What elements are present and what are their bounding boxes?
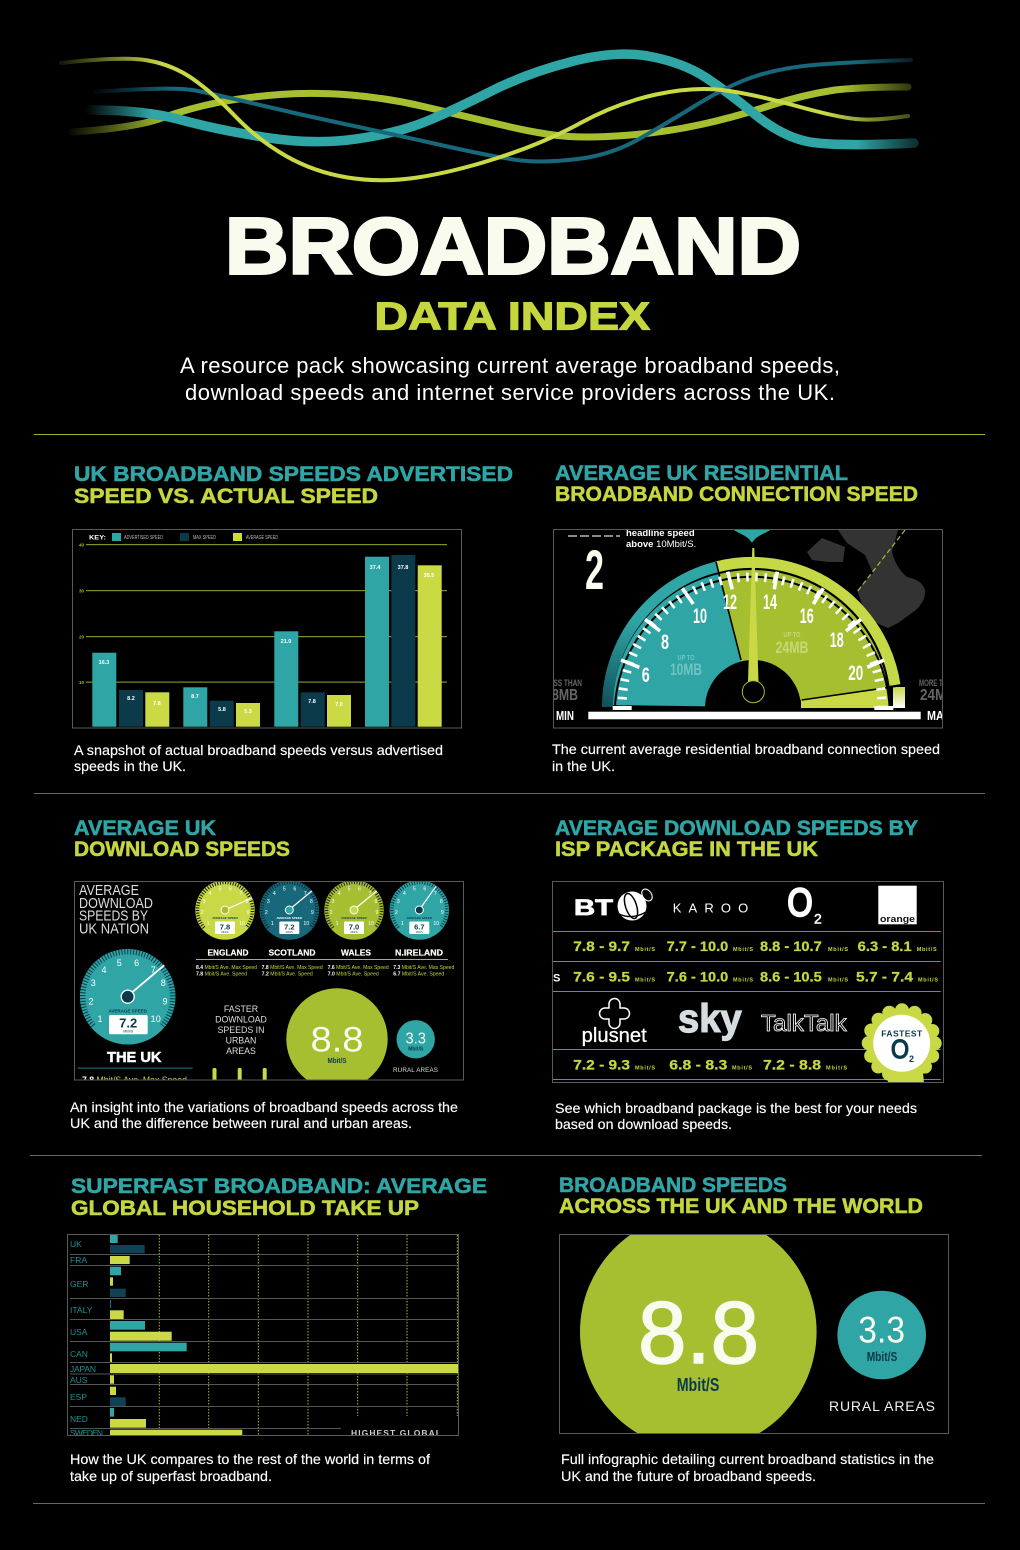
caption: take up: How the UK compares to the rest of the world in terms of <box>70 1451 430 1467</box>
headline speed note <box>568 530 696 589</box>
heading: UK and world speeds <box>559 1174 923 1218</box>
country labels: NED <box>70 1414 88 1424</box>
gauge: Scotland: 9 <box>311 910 314 916</box>
speed row 1: Mbit/S <box>917 947 937 953</box>
rural circle: 3.3 <box>858 1309 905 1350</box>
country labels: USA <box>70 1327 88 1337</box>
heading: advertised vs actual: SPEED VS. ACTUAL SPEED <box>74 485 378 508</box>
rural circle <box>837 1291 926 1379</box>
gauge: England: 9 <box>247 910 250 916</box>
heading: UK and world speeds: BROADBAND SPEEDS <box>559 1174 787 1197</box>
gauge: the UK: AVERAGE SPEED <box>108 1009 148 1014</box>
speed row 2: S <box>553 972 560 984</box>
headline speed note: headline speed <box>626 528 695 539</box>
bar values: 5.3 <box>244 709 252 715</box>
bars <box>92 555 442 727</box>
bar values: 7.8 <box>153 701 161 707</box>
panel: speedometer gauge <box>554 530 942 720</box>
gauge: Wales: 10 <box>368 921 374 927</box>
panel label: UK NATION <box>79 922 149 938</box>
caption: advertised vs actual: speeds in the UK. <box>74 758 186 774</box>
gauge: the UK: 6 <box>134 958 139 968</box>
bar values: 37.8 <box>398 565 408 571</box>
min and max labels: MORE THAN <box>919 678 956 688</box>
speed row 1: 6.3 - 8.1 <box>858 939 912 954</box>
bar values: 7.8 <box>308 699 316 705</box>
speed row 1: Mbit/S <box>828 947 848 953</box>
gauge: Scotland: Mbit/S <box>286 931 293 934</box>
caption: ISP speeds: based on download speeds. <box>555 1116 732 1132</box>
urban note: SPEEDS IN <box>218 1025 264 1035</box>
gauge: the UK: Mbit/S <box>123 1030 134 1034</box>
speed row 2: 5.7 - 7.4 <box>856 970 914 984</box>
panel: global take up bar chart <box>68 1234 459 1438</box>
panel label: AVERAGE <box>79 883 139 899</box>
gauge: Scotland: 7.2 <box>284 922 295 932</box>
heading: ISP package speeds <box>555 817 918 861</box>
heading: superfast take up <box>71 1175 487 1220</box>
heading: UK and world speeds: ACROSS THE UK AND THE WORLD <box>559 1195 923 1218</box>
caption: residential speed <box>552 741 940 774</box>
heading: download speeds: AVERAGE UK <box>74 817 216 840</box>
band labels: UP TO <box>784 630 801 639</box>
gauge: Wales: 9 <box>376 910 379 916</box>
gauge: Wales: 7.0 <box>349 922 359 932</box>
gauge: Northern Ireland: Mbit/S <box>416 931 423 934</box>
heading: advertised vs actual <box>74 463 513 508</box>
grid lines <box>159 1235 457 1436</box>
gauge: Wales: 8 <box>375 899 378 905</box>
dial numbers: 6 <box>642 664 650 687</box>
gauge: Northern Ireland: 8 <box>440 899 443 905</box>
bar values: 8.2 <box>127 696 135 702</box>
speed row 1: Mbit/S <box>635 947 655 953</box>
gauge: Wales: AVERAGE SPEED <box>341 916 368 920</box>
urban speed circle <box>286 988 388 1090</box>
headline speed note: above 10Mbit/S. <box>626 539 696 550</box>
speed row 3: Mbit/S <box>732 1066 752 1072</box>
speed row 2: Mbit/S <box>635 978 655 984</box>
gauge: Northern Ireland: 4 <box>403 891 406 897</box>
panel: bar chart of advertised and actual speeds <box>72 530 462 728</box>
gauge: England: 6 <box>229 886 232 892</box>
intro text <box>180 353 840 405</box>
urban circle: 8.8 <box>638 1283 759 1382</box>
heading: residential connection speed: AVERAGE UK RESIDENTIAL <box>555 462 848 485</box>
band labels <box>670 632 808 675</box>
gauge: England: 4 <box>209 891 212 897</box>
panel: urban and rural speeds <box>560 1213 948 1450</box>
gauge: Northern Ireland: AVERAGE SPEED <box>406 916 433 920</box>
country labels: SWEDEN <box>70 1428 103 1438</box>
logo: BT <box>574 887 654 920</box>
urban speed circle: 8.8 <box>310 1020 364 1060</box>
logo: TalkTalk: TalkTalk <box>761 1010 847 1036</box>
dial numbers: 16 <box>800 605 814 628</box>
fastest rosette: O <box>891 1034 909 1064</box>
speed row 1: 8.8 - 10.7 <box>760 939 822 954</box>
gauge: England: 8 <box>246 899 249 905</box>
speed row 2: 7.6 - 10.0 <box>667 970 728 984</box>
gauge: Wales: 7 <box>369 891 372 897</box>
country labels: ESP <box>70 1392 87 1402</box>
gauge: Wales: 6 <box>358 886 361 892</box>
nation names: SCOTLAND <box>268 948 316 958</box>
gauge: England: 5 <box>219 886 222 892</box>
speed row 1: 7.8 - 9.7 <box>573 939 630 954</box>
gauge: Northern Ireland: 1 <box>401 921 404 927</box>
urban speed circle: Mbit/S <box>328 1058 347 1065</box>
gauge: England: 3 <box>203 899 206 905</box>
gauge: Wales: 5 <box>348 886 351 892</box>
heading: superfast take up: GLOBAL HOUSEHOLD TAKE UP <box>71 1197 419 1220</box>
grid and axis labels: 40 <box>79 542 85 548</box>
country labels <box>70 1239 103 1438</box>
pointer tip <box>734 530 770 543</box>
bar values: 8.7 <box>191 694 199 700</box>
gauge: Northern Ireland: 5 <box>413 886 416 892</box>
gauge: Wales: 3 <box>332 899 335 905</box>
gauge: England: Mbit/S <box>221 931 229 934</box>
title: BROADBAND <box>225 202 801 290</box>
caption: advertised vs actual <box>74 742 443 774</box>
gauge: the UK <box>80 949 176 1044</box>
fastest rosette: 2 <box>909 1054 914 1064</box>
urban note: DOWNLOAD <box>215 1014 267 1024</box>
UK label and figure: THE UK <box>107 1049 162 1066</box>
gauge: Northern Ireland: 6.7 <box>414 922 425 932</box>
logo: BT: BT <box>574 895 614 920</box>
gauge: Northern Ireland: 3 <box>397 899 400 905</box>
country labels: CAN <box>70 1349 88 1359</box>
speed row 1 <box>574 941 936 952</box>
gauge: Scotland: 7 <box>304 891 307 897</box>
gauge: Northern Ireland <box>390 880 449 940</box>
speed row 2: Mbit/S <box>828 978 848 984</box>
gauge: the UK: 1 <box>97 1014 103 1024</box>
caption: take up <box>70 1451 430 1484</box>
gauge: Northern Ireland: 9 <box>441 910 444 916</box>
bar values: 37.4 <box>370 565 381 571</box>
nation speed figures: 6.7 Mbit/S Ave. Speed <box>393 972 445 978</box>
speed row 3: 7.2 - 9.3 <box>573 1058 631 1072</box>
panel: ISP speed table <box>552 882 944 1083</box>
gauge: Scotland: AVERAGE SPEED <box>276 916 303 920</box>
panel label: DOWNLOAD <box>79 896 153 912</box>
nation speed figures <box>196 965 455 978</box>
panel: download speeds by nation <box>74 880 464 1090</box>
rural label: RURAL AREAS <box>829 1398 935 1414</box>
dial numbers: 18 <box>830 629 844 652</box>
min and max labels: MIN <box>556 708 574 723</box>
caption: full infographic <box>561 1451 934 1484</box>
band labels: UP TO <box>678 653 695 662</box>
min and max labels: MAX <box>927 708 951 723</box>
nation speed figures: 7.6 Mbit/S Ave. Max Speed <box>328 965 389 971</box>
bar values <box>99 565 434 715</box>
caption: advertised vs actual: A snapshot of actual broadband speeds versus advertised <box>74 742 443 758</box>
urban circle: Mbit/S <box>677 1375 719 1395</box>
gauge: Scotland: 6 <box>293 886 296 892</box>
heading: residential connection speed: BROADBAND CONNECTION SPEED <box>555 483 918 506</box>
gauge: the UK: 4 <box>101 965 107 975</box>
nation names: WALES <box>341 948 371 958</box>
chart key <box>89 533 278 542</box>
gauge: Scotland: 5 <box>283 886 286 892</box>
caption: download speeds: An insight into the variations of broadband speeds across the <box>70 1099 458 1115</box>
gauge: England: 7 <box>240 891 243 897</box>
caption: ISP speeds: See which broadband package is the best for your needs <box>555 1100 917 1116</box>
dial numbers: 10 <box>693 605 707 628</box>
gauge: Northern Ireland: 10 <box>433 921 439 927</box>
fastest rosette <box>869 1010 935 1083</box>
rural speed circle: 3.3 <box>405 1030 426 1048</box>
urban note: AREAS <box>226 1046 256 1056</box>
gauge: the UK: 10 <box>151 1014 161 1024</box>
country labels: ITALY <box>70 1305 93 1315</box>
caption: full infographic: Full infographic detailing current broadband statistics in the <box>561 1451 934 1467</box>
country labels: FRA <box>70 1255 87 1265</box>
heading: ISP package speeds: ISP PACKAGE IN THE UK <box>555 838 818 861</box>
rural speed circle: Mbit/S <box>408 1046 424 1052</box>
speed row 2: 7.6 - 9.5 <box>573 970 631 984</box>
band labels: 10MB <box>670 660 702 679</box>
logo: Karoo: KAROO <box>673 900 748 916</box>
speed row 2: Mbit/S <box>733 978 753 984</box>
min and max labels: LESS THAN <box>545 678 582 688</box>
chart key: AVERAGE SPEED <box>246 535 278 541</box>
grid and axis labels <box>79 542 447 685</box>
grid and axis labels: 20 <box>79 634 85 640</box>
gauge: England: 2 <box>201 910 204 916</box>
gauge: Scotland: 1 <box>271 921 274 927</box>
heading: download speeds: DOWNLOAD SPEEDS <box>74 838 290 861</box>
dial numbers: 8 <box>661 631 669 654</box>
fastest rosette: FASTEST <box>881 1028 923 1038</box>
headline speed note: 2 <box>585 538 604 601</box>
gauge: Northern Ireland: 6 <box>423 886 426 892</box>
heading: advertised vs actual: UK BROADBAND SPEEDS ADVERTISED <box>74 463 513 486</box>
table rules <box>553 931 941 1080</box>
nation speed figures: 7.2 Mbit/S Ave. Speed <box>262 972 313 978</box>
speed row 1: 7.7 - 10.0 <box>667 939 728 954</box>
caption: download speeds: UK and the difference between rural and urban areas. <box>70 1115 412 1131</box>
gauge: Northern Ireland: 2 <box>395 910 398 916</box>
gauge: England: 1 <box>207 921 210 927</box>
gauge: Wales: Mbit/S <box>350 931 358 934</box>
min and max labels <box>554 680 942 720</box>
country labels: AUS <box>70 1375 88 1385</box>
bar values: 35.5 <box>424 573 434 579</box>
UK label and figure: 7.8 Mbit/S Ave. Max Speed <box>82 1075 187 1085</box>
band labels: 24MB <box>776 638 808 657</box>
intro text: A resource pack showcasing current average broadband speeds, <box>180 353 840 378</box>
speed row 3: Mbit/S <box>826 1066 847 1072</box>
nation names <box>208 949 443 956</box>
dial numbers: 12 <box>723 591 737 614</box>
logo: O2: 2 <box>814 910 822 926</box>
gauge: the UK: 3 <box>91 978 96 988</box>
nation speed figures: 8.4 Mbit/S Ave. Max Speed <box>196 965 257 971</box>
grid and axis labels: 30 <box>79 588 85 594</box>
speed row 2: 8.6 - 10.5 <box>760 970 822 984</box>
rural speed circle: RURAL AREAS <box>393 1067 438 1074</box>
dial <box>602 556 905 708</box>
speed row 3: 6.8 - 8.3 <box>669 1058 728 1072</box>
gauge: Scotland: 4 <box>273 891 276 897</box>
subtitle: DATA INDEX <box>374 296 650 338</box>
gauge: Northern Ireland: 7 <box>434 891 437 897</box>
country labels: JAPAN <box>70 1364 96 1374</box>
caption: residential speed: The current average residential broadband connection speed <box>552 741 940 757</box>
gauge: England: AVERAGE SPEED <box>212 916 239 920</box>
logo: Orange: orange <box>880 914 915 924</box>
nation names: ENGLAND <box>208 948 248 958</box>
rural speed circle <box>393 1020 438 1074</box>
logo: Plusnet: plusnet <box>582 1025 647 1047</box>
rural circle: Mbit/S <box>867 1349 898 1364</box>
dial numbers <box>642 591 863 687</box>
speed row 2 <box>553 972 938 982</box>
speed row 3: Mbit/S <box>635 1066 655 1072</box>
caption: full infographic: UK and the future of broadband speeds. <box>561 1468 816 1484</box>
chart key: MAX SPEED <box>193 535 216 541</box>
gauge: Wales: 2 <box>330 910 333 916</box>
nation speed figures: 7.3 Mbit/S Ave. Max Speed <box>393 965 455 971</box>
nation names: N.IRELAND <box>395 948 443 958</box>
country bars <box>110 1235 459 1436</box>
heading: download speeds <box>74 817 290 861</box>
dial numbers: 20 <box>848 662 863 685</box>
bar values: 21.0 <box>281 639 291 645</box>
gauge: England: 7.8 <box>220 922 230 932</box>
gauge: Wales: 4 <box>338 891 341 897</box>
gauge: the UK: 9 <box>162 997 168 1007</box>
logo: Plusnet <box>582 998 647 1047</box>
speed row 2: Mbit/S <box>918 978 938 984</box>
urban note: FASTER <box>224 1004 258 1014</box>
gauge: the UK: 2 <box>88 997 94 1007</box>
UK label and figure <box>78 1052 193 1080</box>
dial numbers: 14 <box>763 591 777 614</box>
speed row 3: 7.2 - 8.8 <box>763 1058 822 1072</box>
logo: Sky: sky <box>678 997 742 1041</box>
gauge: England: 10 <box>239 921 245 927</box>
caption: download speeds <box>70 1099 458 1131</box>
nation speed figures: 7.8 Mbit/S Ave. Speed <box>196 972 247 978</box>
icon: UK map <box>807 530 925 628</box>
needle <box>742 548 764 703</box>
caption: residential speed: in the UK. <box>552 758 615 774</box>
panel label: SPEEDS BY <box>79 908 148 924</box>
speed row 3 <box>574 1060 847 1070</box>
urban note: URBAN <box>226 1036 256 1046</box>
gauge: England <box>195 880 255 940</box>
min and max labels: 8MB <box>552 687 578 704</box>
heading: ISP package speeds: AVERAGE DOWNLOAD SPEEDS BY <box>555 817 918 840</box>
scale bar <box>588 706 921 719</box>
intro text: download speeds and internet service providers across the UK. <box>185 380 835 405</box>
gauge: Scotland <box>260 880 319 940</box>
gauge: Scotland: 2 <box>265 910 268 916</box>
country labels: UK <box>70 1239 82 1249</box>
heading: superfast take up: SUPERFAST BROADBAND: AVERAGE <box>71 1175 487 1198</box>
urban note <box>212 1004 267 1082</box>
gauge: Wales <box>324 880 384 940</box>
speed row 1: Mbit/S <box>733 947 753 953</box>
urban circle <box>580 1213 817 1450</box>
heading: residential connection speed <box>555 462 918 506</box>
nation speed figures: 7.0 Mbit/S Ave. Speed <box>328 972 379 978</box>
bar values: 7.0 <box>335 702 343 708</box>
header ribbons <box>61 54 914 180</box>
bar values: 5.8 <box>218 707 226 713</box>
gauge: Scotland: 10 <box>303 921 309 927</box>
chart key: ADVERTISED SPEED <box>124 535 163 541</box>
gauge: Scotland: 8 <box>310 899 313 905</box>
gauge: Scotland: 3 <box>267 899 270 905</box>
gauge: the UK: 8 <box>161 978 166 988</box>
gauge: the UK: 7 <box>151 965 156 975</box>
highest global note: HIGHEST GLOBAL <box>351 1428 441 1438</box>
min and max labels: 24MB <box>920 687 956 704</box>
caption: ISP speeds <box>555 1100 917 1132</box>
chart key: KEY: <box>89 534 106 542</box>
gauge: the UK: 5 <box>117 958 122 968</box>
bar values: 16.3 <box>99 660 109 666</box>
logo: O2: O <box>788 882 812 924</box>
panel label <box>79 885 152 934</box>
caption: take up: take up of superfast broadband. <box>70 1468 272 1484</box>
gauge: the UK: 7.2 <box>119 1016 137 1031</box>
gauge: Wales: 1 <box>336 921 339 927</box>
nation speed figures: 7.8 Mbit/S Ave. Max Speed <box>262 965 323 971</box>
grid and axis labels: 10 <box>79 680 85 685</box>
country labels: GER <box>70 1279 88 1289</box>
logo: Orange <box>878 886 917 924</box>
